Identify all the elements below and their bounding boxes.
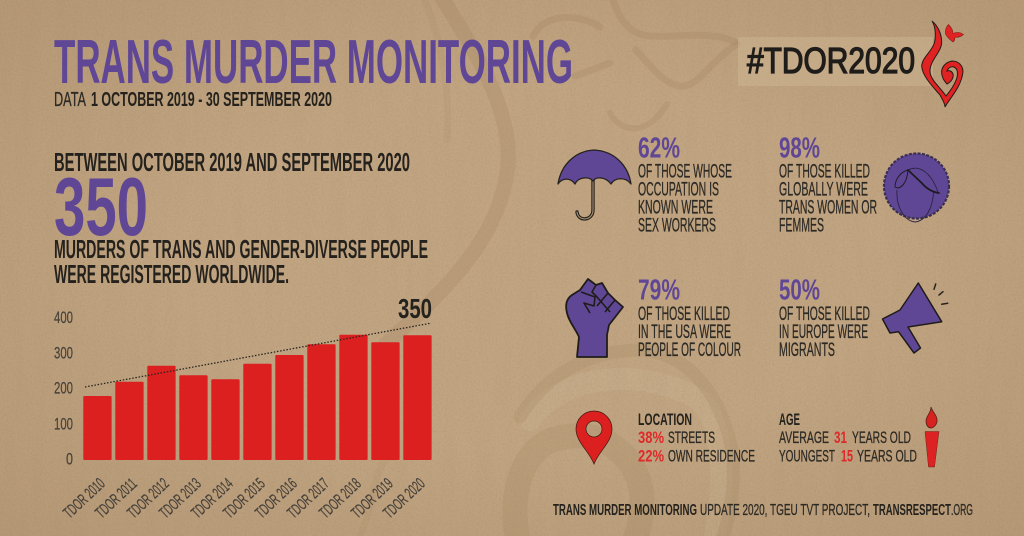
- subtitle: data period: [54, 89, 332, 111]
- bar chart: murders per TDOR year: [54, 293, 432, 522]
- x axis labels: TDOR 2015: [221, 475, 269, 522]
- location text: 22%: [638, 446, 664, 466]
- value label: 350: [398, 293, 432, 324]
- headline statistic text block: [54, 147, 428, 289]
- panel: location: [576, 410, 755, 466]
- x axis labels: TDOR 2016: [253, 475, 301, 522]
- statistic text: IN THE USA WERE: [638, 322, 731, 343]
- age text: AGE: [779, 410, 800, 429]
- age text: 31: [834, 428, 847, 447]
- icon: torch: [925, 407, 939, 467]
- x axis labels: TDOR 2017: [285, 475, 333, 522]
- statistic text: [779, 274, 870, 361]
- statistic text: MIGRANTS: [779, 340, 835, 361]
- panel: age: [779, 407, 939, 467]
- location text: OWN RESIDENCE: [668, 446, 755, 466]
- location text: 38%: [638, 428, 664, 447]
- statistic text: KNOWN WERE: [638, 198, 713, 218]
- statistic text: 62%: [638, 132, 680, 164]
- y axis labels: 400: [54, 308, 73, 327]
- statistic text: SEX WORKERS: [638, 216, 716, 236]
- subtitle: data period: 1 OCTOBER 2019 - 30 SEPTEMBER 2020: [91, 89, 332, 111]
- panel: people of colour statistic: [566, 274, 741, 361]
- headline statistic text block: WERE REGISTERED WORLDWIDE.: [54, 259, 289, 289]
- statistic text: PEOPLE OF COLOUR: [638, 340, 741, 361]
- hashtag on paper tape: #TDOR2020: [747, 40, 915, 81]
- age text: YOUNGEST: [779, 446, 835, 466]
- y axis labels: 0: [66, 450, 73, 468]
- statistic text: FEMMES: [779, 216, 824, 236]
- headline statistic text block: 350: [54, 160, 148, 253]
- statistic text: [779, 132, 877, 236]
- x axis labels: TDOR 2020: [381, 475, 429, 522]
- panel: sex workers statistic: [558, 132, 732, 236]
- statistic text: OF THOSE KILLED: [779, 162, 870, 182]
- panel: trans women statistic: [779, 132, 949, 236]
- trend line: [85, 323, 430, 387]
- statistic text: GLOBALLY WERE: [779, 180, 868, 200]
- statistic text: OF THOSE KILLED: [638, 304, 730, 325]
- y axis labels: 200: [54, 378, 73, 398]
- location text: LOCATION: [638, 410, 692, 429]
- statistic text: [638, 132, 732, 236]
- subtitle: data period: DATA: [54, 89, 86, 111]
- icon: woman with afro: [884, 154, 949, 222]
- icon: map pin: [576, 411, 612, 464]
- y axis labels: 100: [54, 414, 73, 434]
- footer source line: UPDATE 2020, TGEU TVT PROJECT,: [700, 502, 870, 519]
- y axis labels: [54, 308, 73, 468]
- age text: [779, 410, 917, 466]
- x axis labels: TDOR 2018: [317, 475, 365, 522]
- age text: YEARS OLD: [857, 446, 917, 466]
- location text: [638, 410, 755, 466]
- panel: migrants statistic: [779, 274, 948, 361]
- statistic text: IN EUROPE WERE: [779, 322, 868, 343]
- bars: [83, 335, 432, 460]
- headline statistic text block: BETWEEN OCTOBER 2019 AND SEPTEMBER 2020: [54, 147, 410, 177]
- y axis labels: 300: [54, 344, 73, 362]
- statistic text: OF THOSE KILLED: [779, 304, 870, 325]
- statistic text: 98%: [779, 132, 820, 164]
- title: TRANS MURDER MONITORING: [54, 28, 573, 97]
- footer source line: TRANS MURDER MONITORING: [553, 502, 697, 519]
- footer source line: .ORG: [951, 502, 973, 519]
- statistic text: 79%: [638, 274, 680, 306]
- headline statistic text block: MURDERS OF TRANS AND GENDER-DIVERSE PEOPLE: [54, 234, 428, 264]
- statistic text: OCCUPATION IS: [638, 180, 719, 200]
- x axis labels: [61, 475, 429, 522]
- footer source line: [553, 502, 973, 519]
- icon: megaphone: [882, 283, 948, 353]
- icon: raised fist: [566, 279, 623, 357]
- x axis labels: TDOR 2012: [125, 475, 173, 522]
- x axis labels: TDOR 2019: [349, 475, 397, 522]
- age text: YEARS OLD: [852, 428, 911, 447]
- x axis labels: TDOR 2010: [61, 475, 109, 522]
- x axis labels: TDOR 2013: [157, 475, 205, 522]
- statistic text: 50%: [779, 274, 820, 306]
- footer source line: TRANSRESPECT: [873, 502, 951, 519]
- age text: AVERAGE: [779, 428, 829, 447]
- statistic text: TRANS WOMEN OR: [779, 198, 877, 218]
- x axis labels: TDOR 2011: [93, 475, 141, 522]
- statistic text: OF THOSE WHOSE: [638, 162, 732, 182]
- age text: 15: [841, 446, 853, 466]
- x axis labels: TDOR 2014: [189, 475, 237, 522]
- icon: TDOR flame logo with butterfly: [922, 21, 964, 107]
- location text: STREETS: [668, 428, 715, 447]
- statistic text: [638, 274, 741, 361]
- icon: umbrella: [558, 150, 631, 219]
